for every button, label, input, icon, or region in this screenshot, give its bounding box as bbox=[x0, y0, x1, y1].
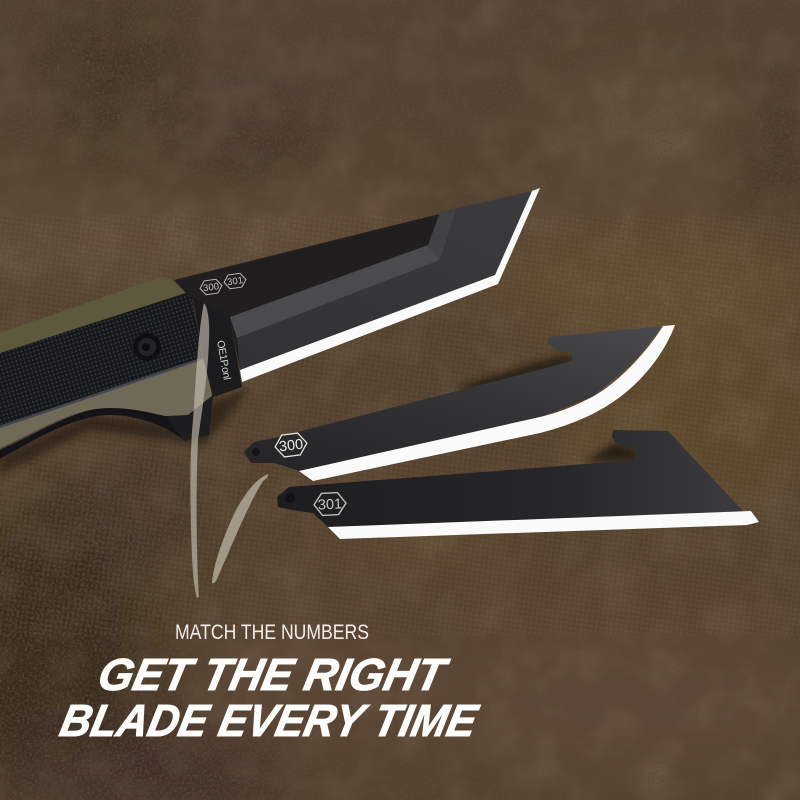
hand-drawn arrow to blade badge bbox=[212, 474, 268, 583]
badge: 300 bbox=[274, 432, 308, 458]
badge: 301 on main knife bbox=[223, 273, 247, 289]
blade 300 notch shadow bbox=[455, 356, 577, 392]
blade 301 pivot hole bbox=[285, 493, 295, 503]
lower guard bbox=[166, 395, 213, 441]
handle blue-grey seam bbox=[0, 358, 204, 427]
etched maker mark: OE1P.onl bbox=[214, 339, 233, 381]
handle lower tan liner bbox=[0, 356, 212, 448]
main blade dark upper flat bbox=[174, 191, 532, 370]
main blade bevel band bbox=[230, 245, 440, 338]
replacement blade 300 bbox=[244, 325, 675, 481]
blade 300 body bbox=[244, 326, 663, 471]
heading bbox=[56, 649, 483, 746]
badge: 301: 301 bbox=[318, 496, 343, 514]
blade tang and guard bbox=[174, 250, 300, 397]
blade 300 pivot hole bbox=[252, 448, 260, 456]
badge: 300: 300 bbox=[278, 437, 304, 455]
badge: 301 on main knife: 301 bbox=[226, 275, 244, 288]
blade 301 white edge bbox=[328, 511, 759, 539]
handle lower dark groove bbox=[0, 407, 185, 459]
main blade bevel facet bbox=[428, 209, 456, 260]
badge: 300 on main knife: 300 bbox=[202, 281, 220, 294]
heading line 1: GET THE RIGHT bbox=[94, 649, 453, 700]
handle olive top liner bbox=[0, 277, 185, 354]
blade 300 white edge bbox=[299, 325, 675, 481]
handle screw bbox=[133, 333, 161, 361]
blade 301 body bbox=[277, 430, 744, 527]
main blade white edge bbox=[240, 188, 540, 382]
hand-drawn arrow to main knife badge bbox=[190, 303, 209, 598]
handle shadow bbox=[0, 388, 250, 475]
badge: 301 bbox=[313, 492, 347, 516]
knife with handle and fixed blade bbox=[0, 188, 540, 475]
replacement blade 301 bbox=[277, 430, 759, 539]
badge: 300 on main knife bbox=[199, 279, 223, 295]
heading line 2: BLADE EVERY TIME bbox=[56, 695, 483, 746]
subheading: MATCH THE NUMBERS bbox=[175, 621, 369, 644]
blade 301 notch shadow bbox=[585, 442, 640, 462]
handle textured black scale bbox=[0, 293, 203, 426]
main blade tip grey flat bbox=[237, 191, 532, 370]
